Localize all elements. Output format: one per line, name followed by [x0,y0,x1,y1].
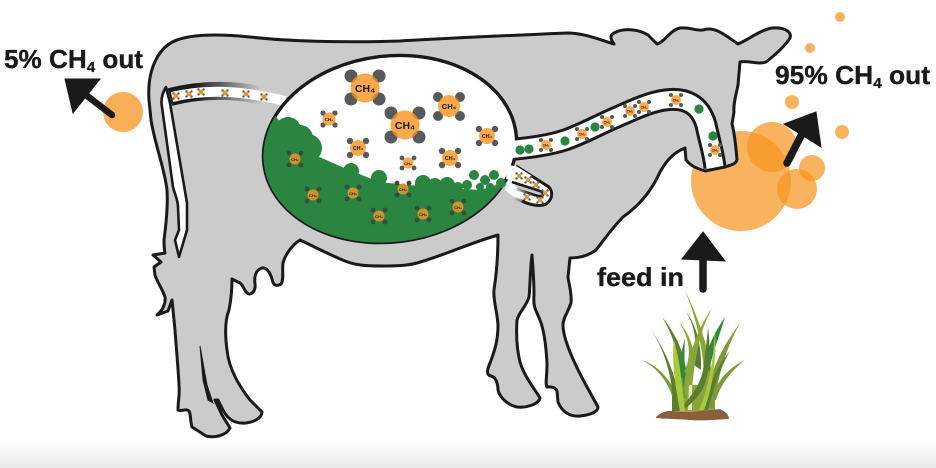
methane molecules in green feed: CH₄ [291,157,299,162]
small methane molecules in outlet tube [515,172,549,204]
methane molecules in gas space [320,70,498,170]
label: 5% methane out: out [95,44,143,74]
icon: grass tuft [641,291,745,420]
methane molecules in gas space: CH₄ [355,83,375,95]
label: 95% methane out: out [882,60,930,90]
rumen [262,54,518,244]
methane molecules in esophagus: CH₄ [579,132,586,136]
arrow: methane out of rear [65,79,112,115]
esophagus tube [505,99,715,168]
methane molecules in gas space: CH₄ [353,146,364,152]
cow outline [149,28,790,437]
arrow: feed in [682,232,725,289]
methane molecules in green feed: CH₄ [419,212,427,217]
methane molecules in green feed: CH₄ [454,205,462,210]
methane molecules in gas space: CH₄ [442,102,457,111]
arrow: methane out of mouth [784,112,821,163]
rumen contents: green feed [263,116,501,243]
methane molecules in gas space: CH₄ [404,161,412,166]
green feed particles in esophagus [515,104,718,155]
methane molecules in esophagus: CH₄ [673,98,680,102]
inner fold of outlet tube [512,182,543,196]
esophagus inner [505,99,715,168]
bubble: 5% methane [103,92,143,132]
methane molecules in green feed: CH₄ [375,214,383,219]
tail [161,87,187,257]
methane molecules in gas space: CH₄ [445,156,456,162]
outlet opening [506,165,532,181]
hind leg shadow [200,346,213,403]
lower stomach outlet tube [505,166,552,205]
soil [656,409,729,420]
methane molecules in esophagus: CH₄ [641,106,648,110]
label: 5% methane out: 5% CH [4,44,86,74]
methane molecules in esophagus [539,93,722,157]
label: 95% methane out: 95% CH [775,60,872,90]
small methane molecules in intestine [172,88,268,101]
loose feed particles [469,170,506,188]
methane molecules in gas space: CH₄ [482,134,493,140]
methane molecules in green feed: CH₄ [309,193,317,198]
bubbles: methane leaving the mouth [691,12,849,231]
label: 5% methane out: 4 [87,59,96,76]
label: feed in: feed in [597,262,684,292]
lower intestine tube [170,91,285,101]
methane molecules in green feed: CH₄ [399,187,407,192]
methane molecules in esophagus: CH₄ [543,144,550,148]
methane molecules in esophagus: CH₄ [627,110,634,114]
methane molecules in esophagus: CH₄ [604,120,611,124]
methane molecules in green feed: CH₄ [349,191,357,196]
cow body [149,28,790,437]
label: 95% methane out: 4 [873,75,882,92]
methane molecules in green feed [287,151,466,224]
methane molecules in gas space: CH₄ [395,120,415,132]
methane molecules in gas space: CH₄ [325,117,333,122]
methane molecules in esophagus: CH₄ [712,148,719,152]
